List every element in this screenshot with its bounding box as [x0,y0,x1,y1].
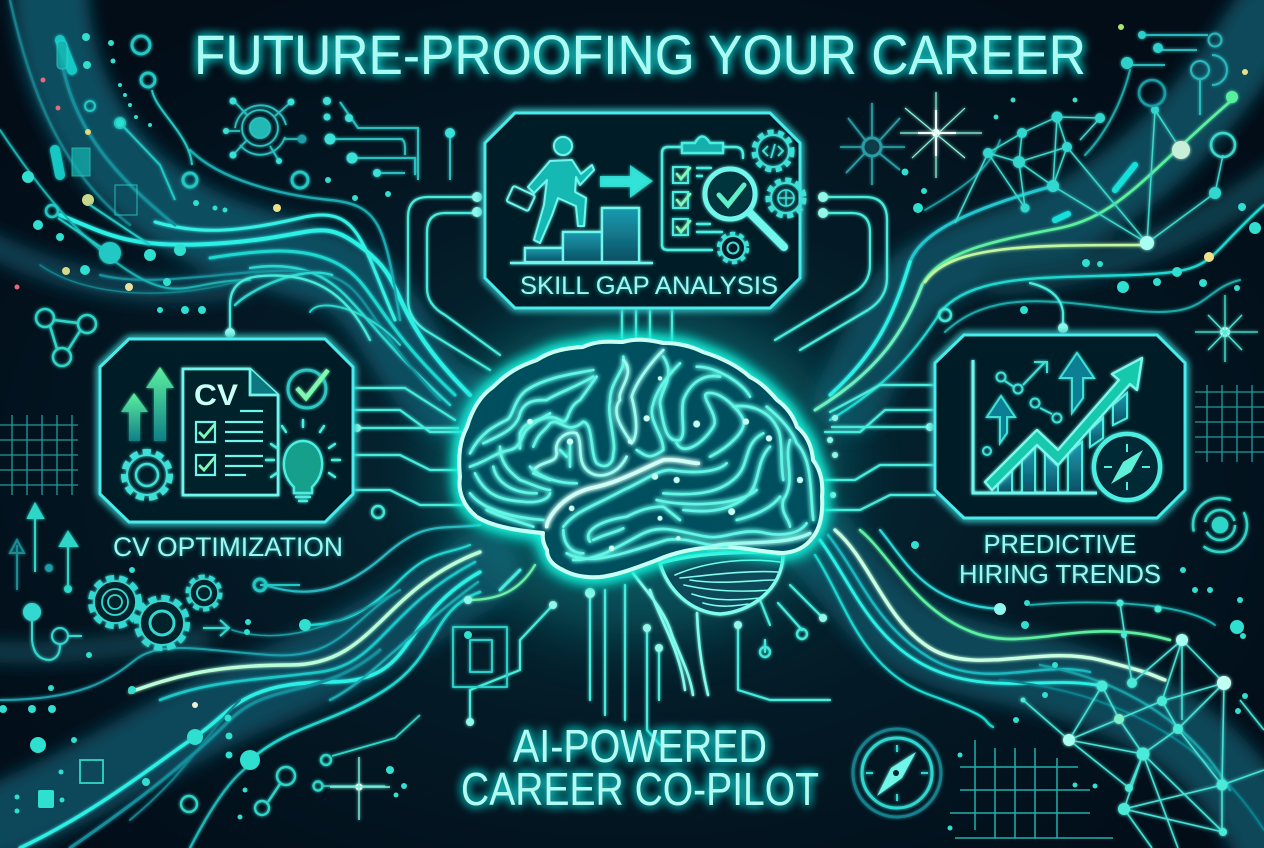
icon: magnifier [705,169,784,247]
arrows left [10,504,77,593]
brain folds [470,350,813,560]
icon: small star bottom [330,757,390,820]
wave bundle: lower left [0,525,480,848]
label: CV optimization: CV OPTIMIZATION [113,532,343,562]
icon: compass bottom [853,729,941,817]
panel frame [485,113,800,308]
chart: small trend lines [983,353,1094,455]
icon: climbing person [506,137,594,243]
icon: stairs [510,208,653,263]
panel: CV optimization [100,339,353,562]
chart: rising bars [973,360,1127,493]
icon: target top left [223,98,306,164]
grid bottom right [950,740,1113,838]
panel frame [100,339,353,522]
brain outline [459,340,822,577]
brain halo [435,305,845,635]
icon: growth arrows [121,367,174,441]
wave bundle: upper left [0,0,470,405]
icon: arrow [600,165,653,198]
icon: gears lower left [91,577,229,648]
panel frame [935,335,1185,518]
label: predictive hiring trends: PREDICTIVE [984,529,1136,559]
rings lower left [181,715,420,815]
circuit rings [372,309,951,657]
icon: star right [1195,295,1258,362]
icon: star node top right [840,103,905,185]
circuit traces linking panels to brain [230,197,1063,745]
brain stem [633,573,708,695]
icon: bright star top right [900,92,982,178]
cerebellum [660,552,783,614]
icon: clipboard checklist [662,136,743,250]
brain [459,340,822,695]
heading: AI-powered career co-pilot: CAREER CO-PILOT [461,763,819,815]
circuit: top right corner [1121,31,1227,115]
grid right [1195,385,1264,462]
chart: main trend arrow [985,358,1142,490]
icon: node loop lower left [24,604,82,660]
flow nodes and stray lines left [46,36,308,591]
heading: AI-powered career co-pilot: AI-POWERED [513,720,767,772]
title: FUTURE-PROOFING YOUR CAREER [194,23,1086,86]
icon: light bulb [266,420,340,501]
label: skill gap analysis: SKILL GAP ANALYSIS [520,272,778,300]
wave bundle: upper right [815,70,1264,420]
network: bottom right [1020,600,1264,848]
brain nodes [527,376,803,551]
panel: predictive hiring trends [935,335,1185,589]
label: predictive hiring trends: HIRING TRENDS [959,559,1161,589]
circuit nodes [225,192,1068,726]
icon: rings right [1193,498,1247,552]
grid left [0,415,78,495]
wave bundle: lower right [815,530,1264,830]
icon: CV document [183,369,278,495]
icon: node triangle left [36,309,96,366]
icon: check circle [288,370,328,408]
network: top right [955,80,1238,250]
panel: skill gap analysis [485,113,804,308]
icon: compass [1094,434,1160,500]
circuit lines top left [323,97,455,180]
icon: gear [124,452,170,498]
icon: small gear [719,234,747,262]
icon: CV document: CV [194,379,238,412]
decorative squares [57,41,137,783]
icon: globe gear [768,180,804,216]
icon: code gear [754,132,792,170]
